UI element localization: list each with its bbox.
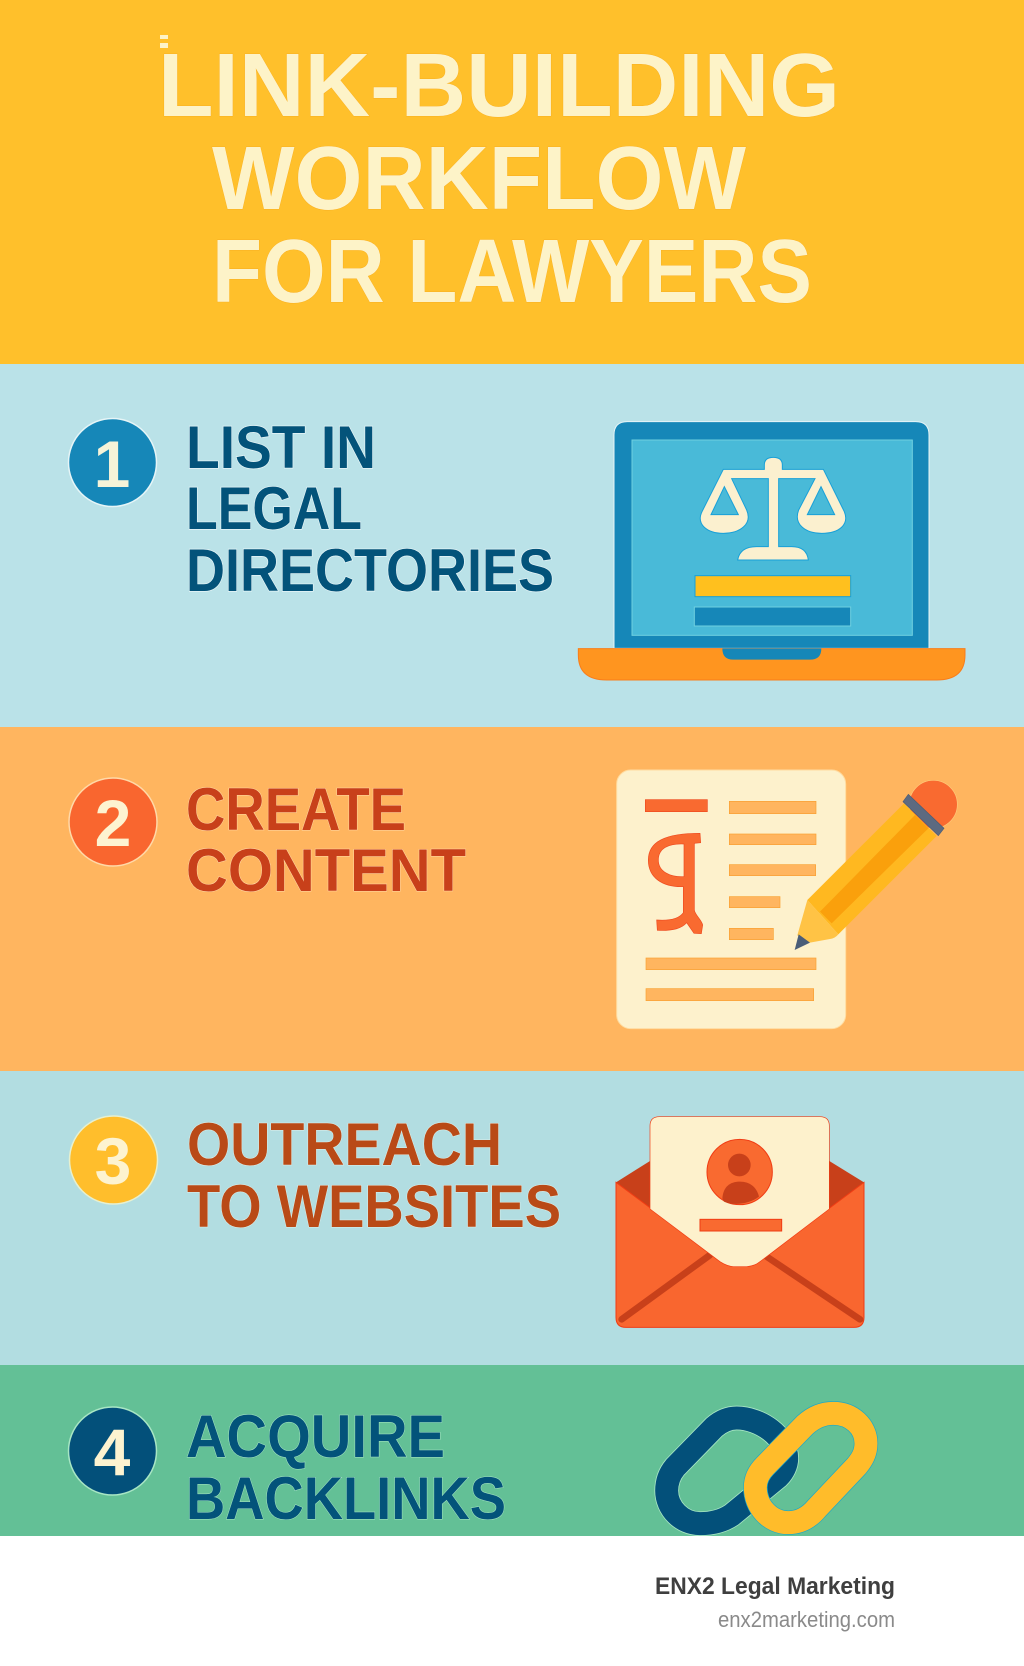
step 2 heading — [186, 776, 466, 904]
step 4 heading — [186, 1403, 506, 1532]
step 3 heading: OUTREACH — [187, 1111, 502, 1178]
panel: title header — [0, 0, 1024, 364]
icon: person avatar — [707, 1139, 772, 1205]
title: FOR LAWYERS — [212, 222, 812, 322]
step 1 heading: LEGAL — [186, 475, 362, 542]
icon: chain links — [667, 1413, 866, 1524]
step 1 heading: LIST IN — [186, 414, 376, 481]
panel: step 4 acquire backlinks — [0, 1365, 1024, 1536]
step 1 number badge — [68, 418, 156, 506]
step 3 heading: TO WEBSITES — [187, 1173, 561, 1240]
website url: enx2marketing.com — [718, 1607, 895, 1632]
icon: envelope with letter — [616, 1117, 864, 1327]
icon: pilcrow glyph — [648, 833, 703, 934]
step 3 number badge: 3 — [95, 1124, 131, 1198]
panel: step 1 list in legal directories — [0, 364, 1024, 727]
step 1 heading: DIRECTORIES — [186, 537, 554, 604]
step 2 number badge: 2 — [95, 786, 131, 860]
step 3 number badge — [70, 1116, 158, 1204]
icon: scales — [700, 457, 846, 560]
title — [158, 35, 840, 322]
step 2 heading: CONTENT — [186, 837, 466, 904]
step 4 number badge: 4 — [94, 1415, 131, 1489]
step 1 number badge: 1 — [94, 427, 130, 501]
panel: step 3 outreach to websites — [0, 1071, 1024, 1365]
icon: laptop with scales of justice — [578, 422, 965, 680]
step 3 heading — [187, 1111, 561, 1240]
step 2 number badge — [69, 778, 157, 866]
step 4 number badge — [68, 1407, 156, 1495]
title: WORKFLOW — [212, 129, 746, 229]
icon: document and pencil — [617, 770, 957, 1029]
brand name: ENX2 Legal Marketing — [655, 1573, 895, 1600]
step 2 heading: CREATE — [186, 776, 406, 843]
step 4 heading: BACKLINKS — [186, 1465, 506, 1532]
title: LINK-BUILDING — [158, 36, 840, 136]
icon: pencil — [795, 780, 957, 950]
panel: step 2 create content — [0, 727, 1024, 1071]
step 4 heading: ACQUIRE — [186, 1403, 445, 1470]
footer credit — [655, 1573, 895, 1632]
step 1 heading — [186, 414, 554, 604]
